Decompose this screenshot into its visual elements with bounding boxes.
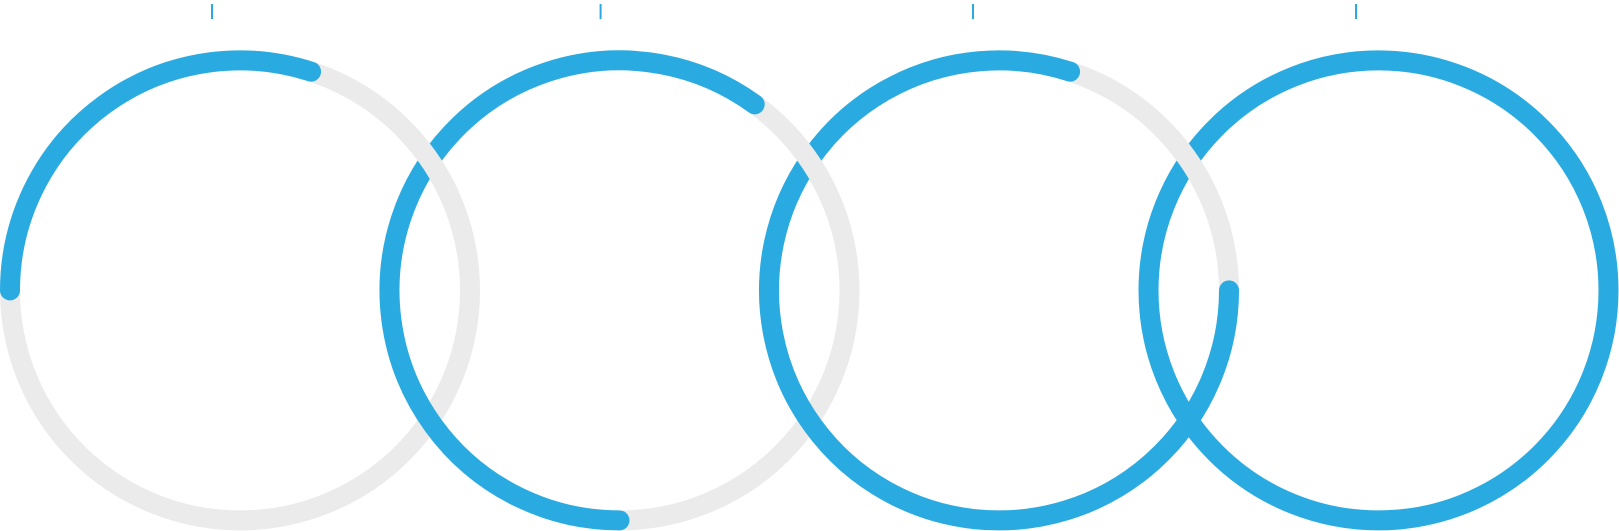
ring 1: 30 percent (10, 60, 470, 520)
ring 3 over ring 4 at upper crossing (1176, 144, 1201, 179)
ring 2: 60 percent (389, 60, 850, 520)
tick mark 2 (600, 4, 602, 19)
ring 2 over ring 3 at upper crossing (797, 144, 822, 180)
tick mark 3 (972, 4, 974, 19)
tick mark 1 (211, 4, 213, 19)
ring 3: 80 percent (769, 60, 1229, 520)
ring 4: 100 percent (1148, 60, 1608, 520)
tick mark 4 (1355, 4, 1357, 19)
ring 1 over ring 2 at upper crossing (418, 144, 442, 179)
